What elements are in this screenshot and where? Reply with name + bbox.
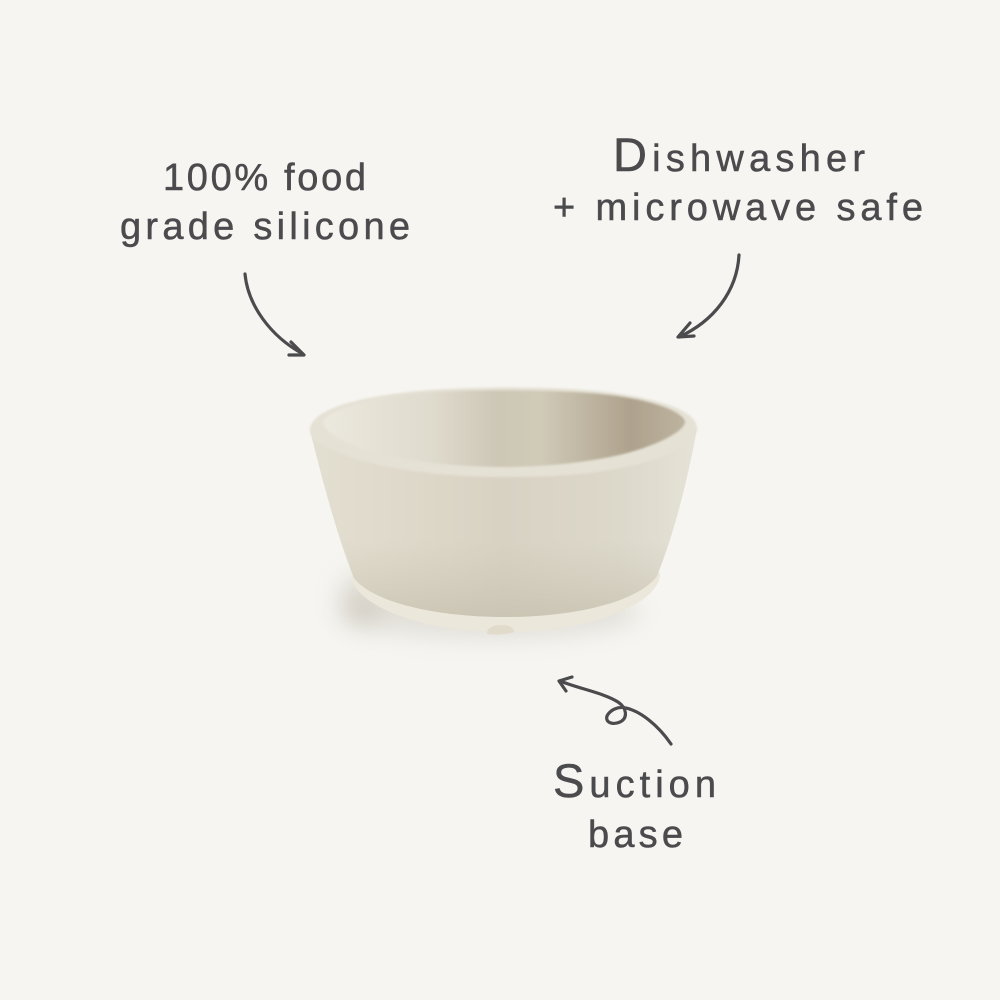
arrow: dishwasher label to bowl [678,255,739,337]
arrow: suction label to base [559,677,671,744]
label: dishwasher and microwave safe: Dishwasher [613,128,865,181]
suction base tab [487,625,514,635]
bowl cast shadow [340,574,640,638]
bowl outer body [310,428,697,617]
label: 100% food grade silicone: 100% food [163,157,366,199]
label: suction base: base [588,814,683,856]
bowl photograph illustration [310,387,697,638]
label: suction base: Suction [553,754,716,807]
arrow: food grade label to bowl [245,274,304,355]
label: dishwasher and microwave safe: + microwave safe [553,187,923,229]
bowl interior [323,390,685,467]
label: 100% food grade silicone: grade silicone [120,206,410,248]
suction base plate [352,560,660,632]
label: suction base [553,754,716,856]
label: 100% food grade silicone [120,157,410,248]
bowl rim [310,387,697,477]
label: dishwasher and microwave safe [553,128,923,229]
lower body shading [342,540,668,617]
